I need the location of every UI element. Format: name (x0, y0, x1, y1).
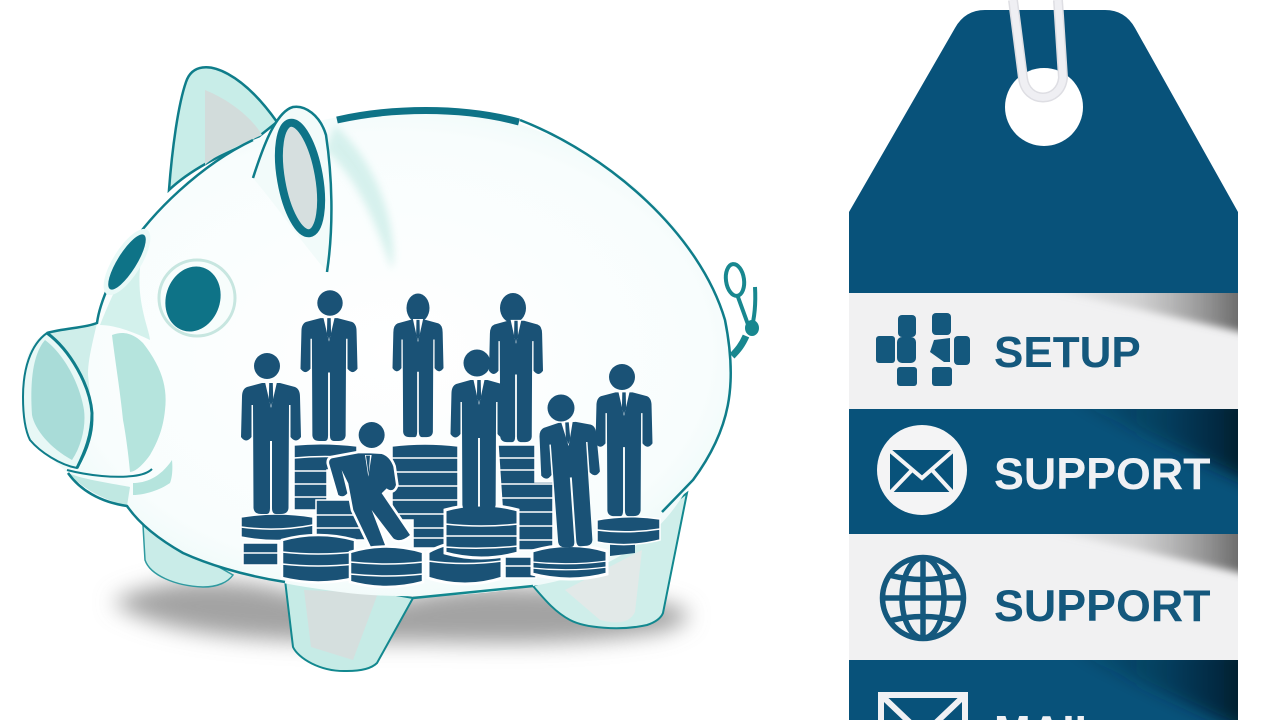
piggy bank illustration (23, 67, 757, 671)
snout inner arc (47, 333, 92, 468)
hind leg (533, 493, 687, 628)
price tag (849, 0, 1255, 720)
coin stack: left front (282, 535, 355, 582)
person 4 (489, 293, 543, 442)
body soft inner glow (325, 125, 393, 270)
coin stack: under person 5 (445, 505, 518, 558)
outline: chin to belly (68, 473, 285, 582)
coin stack: back left (294, 444, 357, 510)
icon: mail (881, 695, 965, 720)
rear ear (169, 67, 277, 190)
rear left leg (143, 525, 233, 587)
coin stack: centre-right back (498, 445, 553, 550)
fallen person (329, 422, 410, 549)
coin stack: far left upper (241, 514, 313, 540)
nostril plate (31, 340, 85, 460)
coin stack: centre tall (392, 444, 458, 548)
mouth (67, 469, 152, 477)
coins and people (241, 290, 660, 587)
person 5 (450, 350, 508, 511)
coin stack: under fallen person (350, 546, 423, 587)
person 1 (241, 353, 301, 514)
tag hole (1005, 68, 1083, 146)
outline: head and chin (47, 140, 253, 333)
label: support: SUPPORT (994, 449, 1211, 499)
icon: app blocks (876, 313, 970, 386)
face mint panel (100, 245, 150, 340)
tag head (849, 10, 1238, 294)
person 7 (596, 364, 652, 516)
outline: back (520, 120, 731, 512)
coin stack: lower right back (505, 557, 536, 578)
paper clip (1013, 0, 1063, 98)
band: support web (849, 534, 1238, 660)
eye ring (159, 260, 235, 336)
snout side (47, 323, 97, 468)
band: mail (849, 660, 1238, 720)
coin stack: far left lower (243, 543, 278, 565)
band: support mail (849, 409, 1238, 534)
person 2 (300, 290, 358, 441)
coin stack: under person 7 small (610, 543, 635, 556)
coin stack: centre front (428, 542, 502, 584)
lower cheek crescent (133, 460, 172, 495)
ground shadow (112, 581, 688, 643)
pig body (23, 109, 731, 596)
front ear (253, 107, 331, 272)
tail (724, 263, 757, 356)
front leg (285, 580, 413, 671)
band: setup (849, 293, 1238, 409)
outline: belly right (413, 586, 533, 598)
person 3 (392, 294, 444, 437)
coin stack: under person 7 (597, 517, 660, 545)
eye (157, 259, 229, 339)
icon: globe (882, 557, 964, 639)
icon: envelope in circle (877, 425, 967, 515)
label: support: SUPPORT (994, 581, 1211, 631)
cheek (112, 333, 166, 472)
coin slot (337, 110, 519, 122)
snout face (23, 333, 92, 468)
coin stack: back lower left (316, 500, 370, 540)
person 6 (538, 394, 605, 549)
chin (68, 473, 130, 506)
brow slot (95, 222, 159, 302)
label: setup: SETUP (994, 328, 1141, 377)
coin stack: under person 6 (532, 546, 607, 579)
